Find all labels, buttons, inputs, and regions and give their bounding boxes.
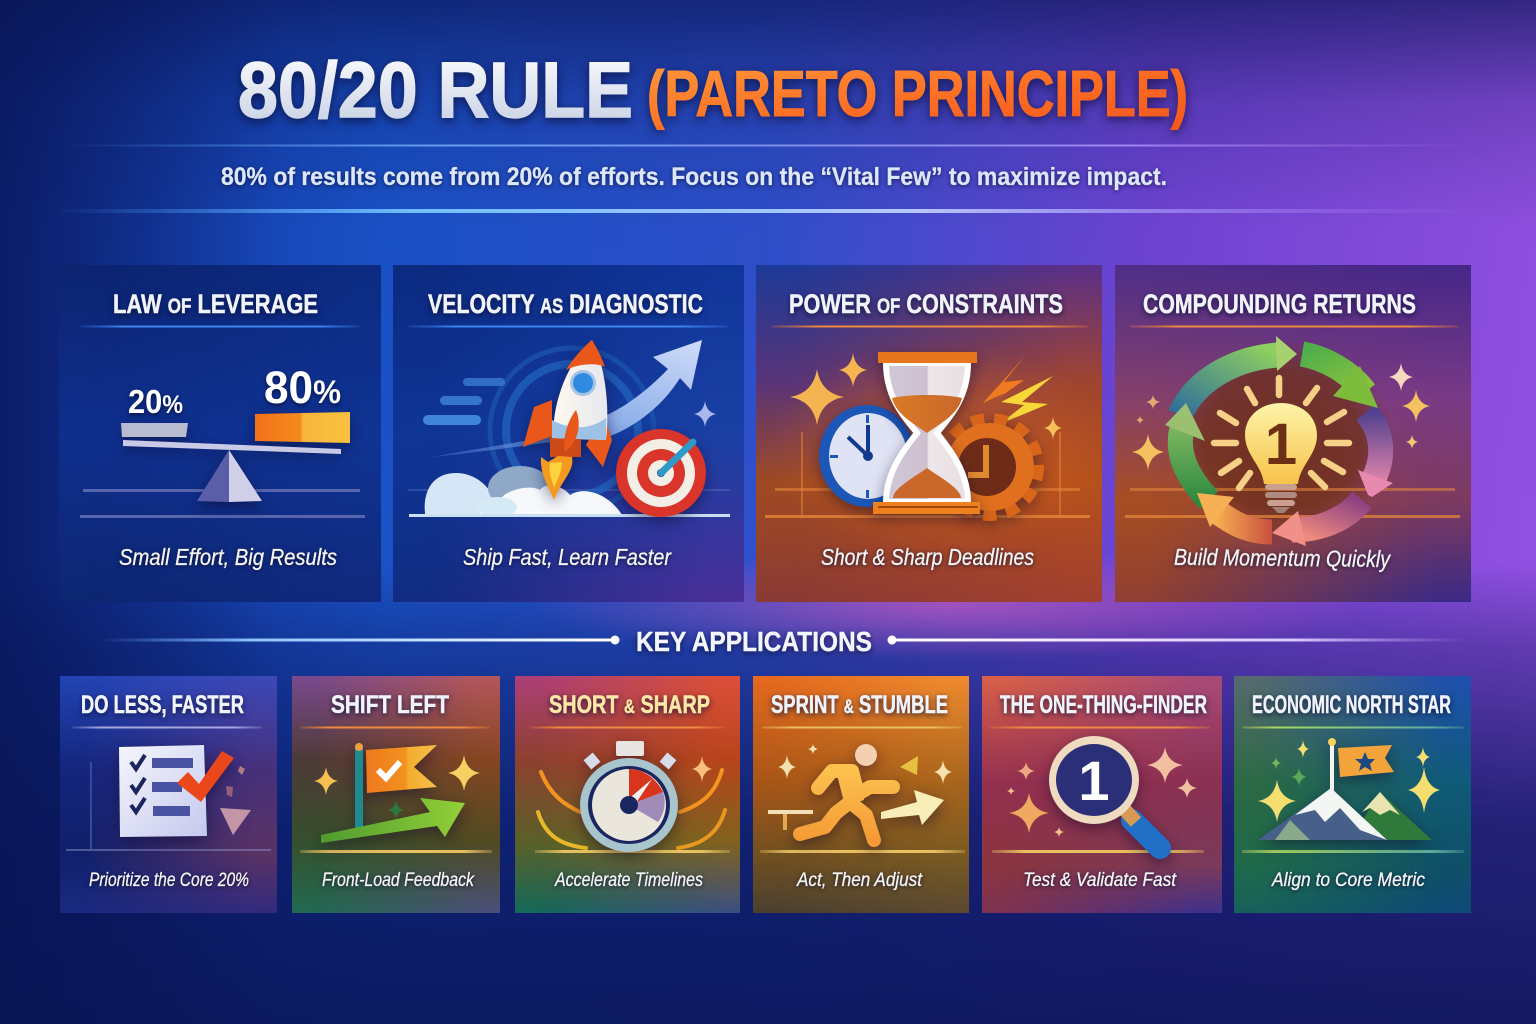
heading: LAW OF LEVERAGE xyxy=(113,289,318,319)
label: 20 percent: 20% xyxy=(128,383,183,420)
heading: COMPOUNDING RETURNS xyxy=(1143,289,1416,319)
tagline: Small Effort, Big Results xyxy=(119,544,337,570)
subtitle: 80% of results come from 20% of efforts. Focus on the “Vital Few” to maximize impact. xyxy=(221,163,1167,191)
tagline: Prioritize the Core 20% xyxy=(89,870,249,891)
tagline: Accelerate Timelines xyxy=(554,870,703,891)
tagline: Front-Load Feedback xyxy=(322,870,475,891)
icon: stopwatch xyxy=(538,741,725,852)
icon: cycle arrows and light bulb xyxy=(1132,336,1430,546)
label: 80 percent: 80% xyxy=(264,362,341,413)
icon: magnifier xyxy=(1007,736,1197,848)
title: (PARETO PRINCIPLE) xyxy=(647,57,1188,130)
tagline: Act, Then Adjust xyxy=(796,870,923,891)
target xyxy=(616,429,706,517)
section heading: key applications: KEY APPLICATIONS xyxy=(636,626,872,657)
hourglass xyxy=(873,352,980,514)
gear xyxy=(942,419,1038,515)
icon: magnifier: 1 xyxy=(1078,749,1110,812)
icon: runner and arrow xyxy=(768,744,952,840)
tagline: Ship Fast, Learn Faster xyxy=(463,544,672,570)
icon: checklist xyxy=(119,745,251,837)
heading: SHIFT LEFT xyxy=(331,691,449,719)
card: do less, faster xyxy=(60,676,277,913)
heading: VELOCITY AS DIAGNOSTIC xyxy=(428,289,703,319)
icon: rocket launch and target xyxy=(409,340,730,517)
panel: compounding returns xyxy=(1115,265,1471,602)
card: the one-thing-finder xyxy=(982,676,1222,913)
card: sprint and stumble xyxy=(753,676,969,913)
tagline: Align to Core Metric xyxy=(1271,870,1425,891)
icon: balance scale xyxy=(121,412,350,502)
tagline: Build Momentum Quickly xyxy=(1174,544,1391,572)
card: economic north star xyxy=(1234,676,1471,913)
bulb xyxy=(1245,403,1317,513)
icon: flag and arrow xyxy=(314,743,480,843)
title xyxy=(238,45,1188,134)
heading: DO LESS, FASTER xyxy=(81,691,244,719)
tagline: Test & Validate Fast xyxy=(1023,870,1177,891)
icon: clock hourglass gear xyxy=(790,352,1062,515)
panel: velocity as diagnostic xyxy=(393,265,744,602)
card: shift left xyxy=(292,676,500,913)
icon: mountain and flag xyxy=(1258,738,1440,840)
title: 80/20 RULE xyxy=(238,45,633,134)
heading: SHORT & SHARP xyxy=(549,691,710,719)
clouds xyxy=(425,466,622,517)
section heading: key applications xyxy=(100,626,1467,657)
rocket xyxy=(523,340,612,500)
panel: law of leverage xyxy=(59,265,381,602)
heading: THE ONE-THING-FINDER xyxy=(1000,691,1207,719)
clock xyxy=(819,405,915,507)
panel: power of constraints xyxy=(756,265,1110,602)
tagline: Short & Sharp Deadlines xyxy=(821,544,1034,570)
rays xyxy=(1214,378,1349,488)
heading: POWER OF CONSTRAINTS xyxy=(789,289,1063,319)
card: short and sharp xyxy=(515,676,740,913)
heading: SPRINT & STUMBLE xyxy=(771,691,948,719)
bulb: 1 xyxy=(1265,412,1297,477)
